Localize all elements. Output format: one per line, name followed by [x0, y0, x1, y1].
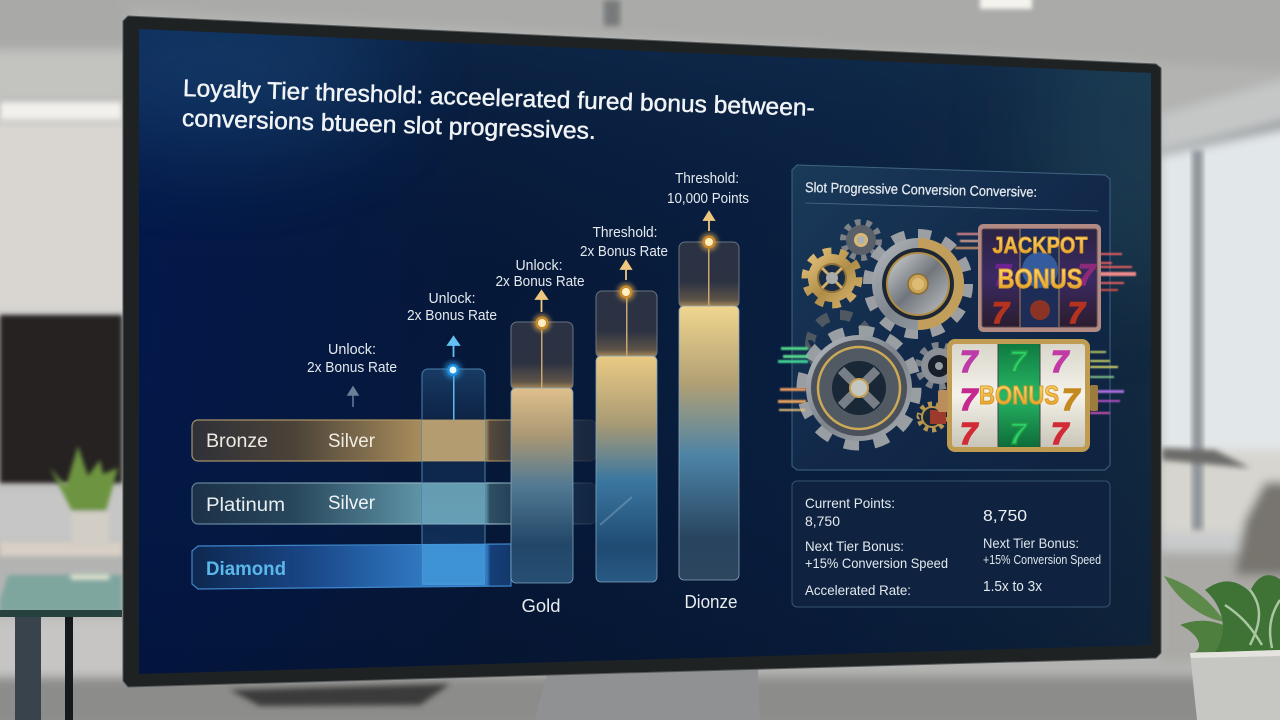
title: conversions btueen slot progressives.	[182, 105, 596, 145]
band: Platinum / Silver: Silver	[328, 493, 376, 514]
icon: gears	[803, 223, 967, 444]
sevens	[960, 344, 1081, 451]
sevens: 7	[994, 259, 1012, 292]
sevens: 7	[960, 382, 979, 417]
stat: next tier bonus, right: Next Tier Bonus:	[983, 535, 1079, 551]
label: tier 5 threshold: 10,000 Points	[667, 191, 749, 207]
gear: small dark	[919, 346, 959, 386]
label: tier 3 unlock: 2x Bonus Rate	[496, 274, 584, 290]
label: Dionze: Dionze	[684, 592, 738, 612]
bar 2: Gold	[511, 314, 573, 583]
label: tier 1 unlock: Unlock:	[328, 342, 376, 358]
label: tier 5 threshold	[667, 171, 749, 207]
icon: jackpot slot reel	[978, 224, 1101, 332]
stat: next tier bonus: +15% Conversion Speed	[805, 555, 948, 571]
icon: bonus slot reel	[938, 339, 1098, 452]
sevens: 7	[960, 416, 979, 451]
bar 1: blue tier	[422, 361, 485, 585]
icon: bonus slot reel: BONUS	[979, 380, 1059, 410]
gear: tiny gold	[919, 404, 946, 430]
label: Gold: Gold	[522, 596, 560, 616]
label: tier 4 threshold: Threshold:	[592, 225, 658, 241]
arrow: tier 1	[348, 387, 358, 407]
icon: jackpot slot reel: BONUS	[998, 263, 1082, 294]
bar 4: Dionze	[679, 233, 739, 580]
gear: dark upper background	[810, 315, 870, 375]
chart: loyalty tier thresholds	[192, 171, 749, 616]
panel heading: Slot Progressive Conversion Conversive:	[805, 179, 1037, 200]
gear: small gold	[806, 252, 858, 304]
panel: slot progressive conversion	[778, 165, 1136, 470]
stat: next tier bonus	[805, 538, 948, 571]
band: Platinum / Silver: Platinum	[206, 495, 285, 516]
stat: current points	[805, 495, 895, 529]
table with glass top	[0, 574, 122, 720]
panel: current points stats	[792, 481, 1110, 607]
stat: current points: 8,750	[805, 513, 840, 529]
bar 3: Threshold tier	[596, 283, 657, 582]
label: tier 4 threshold: 2x Bonus Rate	[580, 244, 668, 260]
band: Diamond: Diamond	[206, 559, 286, 580]
stat: accelerated rate: 1.5x to 3x	[983, 578, 1042, 595]
potted plant, bottom right	[1164, 575, 1280, 720]
stat: accelerated rate: Accelerated Rate:	[805, 582, 911, 598]
sevens: 7	[960, 344, 979, 379]
sevens: 7	[992, 297, 1010, 330]
label: tier 2 unlock	[407, 291, 497, 324]
sevens: 7	[1068, 297, 1086, 330]
band: Bronze / Silver: Bronze	[206, 431, 268, 452]
band: Bronze / Silver	[192, 420, 596, 461]
sevens: 7	[1062, 382, 1081, 417]
stat: accelerated rate	[805, 578, 1042, 598]
icon: jackpot slot reel: JACKPOT	[992, 232, 1088, 258]
icon: speed streaks, bonus reel	[778, 347, 1124, 414]
sevens: 7	[1009, 344, 1028, 379]
label: tier 2 unlock: Unlock:	[428, 291, 476, 307]
label: tier 1 unlock	[307, 342, 397, 376]
arrow: tier 3	[536, 291, 547, 312]
gear: large upper	[869, 235, 967, 333]
sevens: 7	[1051, 344, 1070, 379]
title: Loyalty Tier threshold: acceelerated fured bonus between-	[183, 75, 815, 122]
monitor stand	[535, 668, 760, 720]
gear: small top	[844, 223, 878, 257]
band: Diamond	[192, 544, 511, 589]
monitor screen	[139, 29, 1151, 674]
sevens	[992, 259, 1096, 330]
sevens: 7	[1051, 416, 1070, 451]
label: tier 1 unlock: 2x Bonus Rate	[307, 360, 397, 376]
band: Platinum / Silver	[192, 483, 596, 524]
stat: points value: 8,750	[983, 508, 1027, 525]
label: tier 4 threshold	[580, 225, 668, 260]
stat: next tier bonus: Next Tier Bonus:	[805, 538, 904, 554]
arrow: tier 4	[621, 261, 631, 280]
label: tier 5 threshold: Threshold:	[675, 171, 739, 187]
icon: speed streaks, jackpot reel	[955, 233, 1136, 291]
label: tier 3 unlock	[496, 258, 584, 290]
arrow: tier 2	[448, 337, 459, 357]
arrow: tier 5	[704, 212, 714, 231]
stat: next tier bonus, right: +15% Conversion Speed	[983, 553, 1101, 567]
sevens: 7	[1078, 259, 1096, 292]
label: tier 2 unlock: 2x Bonus Rate	[407, 308, 497, 324]
stat: next tier bonus, right	[983, 535, 1101, 567]
stat: current points: Current Points:	[805, 495, 895, 511]
monitor frame	[123, 16, 1161, 687]
office chair, blurred	[230, 684, 450, 706]
band: Bronze / Silver: Silver	[328, 431, 376, 452]
gear: large lower	[803, 332, 915, 444]
label: tier 3 unlock: Unlock:	[516, 258, 562, 274]
blurred desk plant	[50, 446, 118, 547]
sevens: 7	[1009, 416, 1028, 451]
title	[182, 75, 815, 152]
